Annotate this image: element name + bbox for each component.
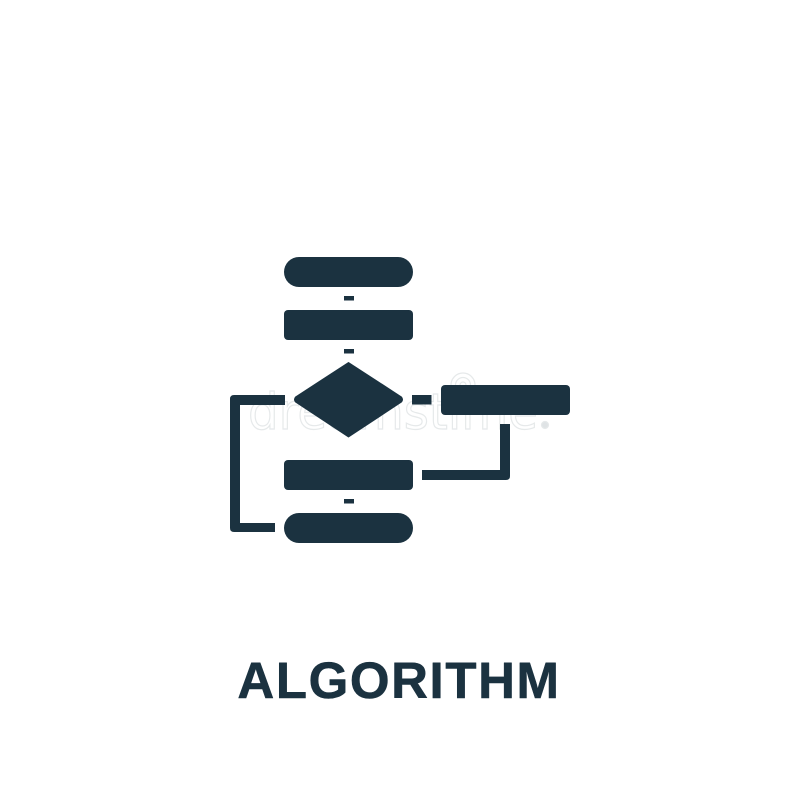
process box 2 xyxy=(284,460,413,490)
title: ALGORITHM xyxy=(237,652,561,709)
loop connector left xyxy=(230,395,285,532)
icon: algorithm flowchart xyxy=(230,257,570,543)
process box right xyxy=(441,385,570,415)
connector dash 1 xyxy=(344,296,354,300)
end terminator xyxy=(284,513,413,543)
connector dash 2 xyxy=(344,349,354,354)
process box 1 xyxy=(284,310,413,340)
return connector right xyxy=(422,424,510,480)
start terminator xyxy=(284,257,413,287)
watermark: dreamstime xyxy=(248,383,538,441)
connector dash 3 xyxy=(344,499,354,504)
decision diamond xyxy=(294,362,402,437)
connector to right box xyxy=(412,395,432,404)
